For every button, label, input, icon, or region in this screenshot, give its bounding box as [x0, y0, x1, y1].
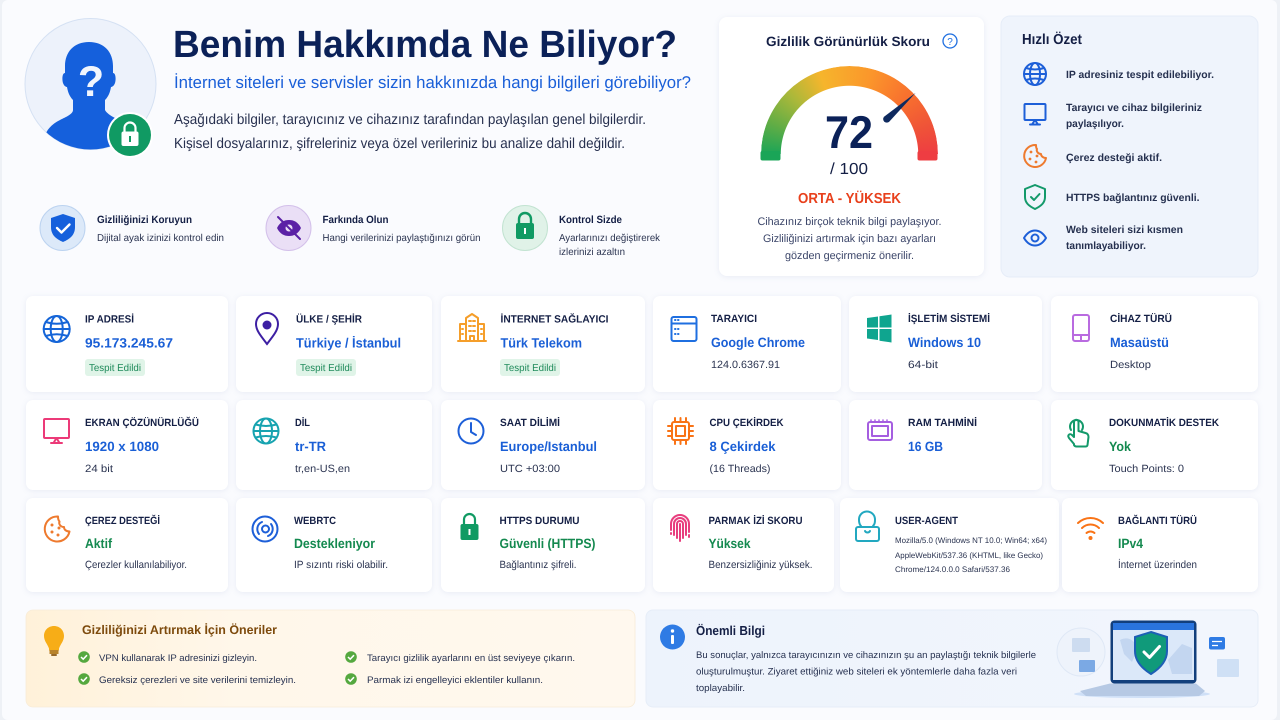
card: touch support: Touch Points: 0 [1109, 463, 1184, 475]
summary item: websites [1066, 224, 1183, 252]
subtitle: İnternet siteleri ve servisler sizin hakkınızda hangi bilgileri görebiliyor? [174, 73, 691, 92]
icon: shield [1025, 185, 1045, 209]
card: cookie support: Aktif [85, 536, 112, 551]
card: webrtc [236, 498, 432, 592]
info text: toplayabilir. [696, 683, 745, 694]
recommendation: cookies: Gereksiz çerezleri ve site verilerini temizleyin. [99, 675, 296, 686]
card: cpu cores: (16 Threads) [710, 463, 770, 475]
feature: protect privacy: Gizliliğinizi Koruyun [97, 214, 192, 226]
summary item: websites: Web siteleri sizi kısmen [1066, 224, 1183, 236]
card: language: DİL [295, 417, 311, 429]
card: internet provider: Türk Telekom [500, 336, 582, 350]
feature: you are in control: Ayarlarınızı değiştirerek [559, 233, 661, 244]
score description: gözden geçirmeniz önerilir. [785, 250, 914, 262]
card: user agent: Mozilla/5.0 (Windows NT 10.0; Win64; x64) [895, 536, 1047, 545]
card: connection type [1062, 498, 1258, 592]
card: ram estimate: RAM TAHMİNİ [908, 417, 977, 429]
card: cookie support [26, 498, 228, 592]
card: device type: CİHAZ TÜRÜ [1110, 313, 1172, 325]
summary item: browser: Tarayıcı ve cihaz bilgileriniz [1066, 102, 1202, 114]
panel: important info [646, 610, 1258, 707]
card: ram estimate: 16 GB [908, 439, 943, 454]
summary heading: Hızlı Özet [1022, 31, 1082, 48]
summary item: https: HTTPS bağlantınız güvenli. [1066, 192, 1200, 204]
card: user agent: AppleWebKit/537.36 (KHTML, like Gecko) [895, 551, 1043, 560]
feature: be aware: Farkında Olun [322, 214, 388, 226]
card: screen resolution [26, 400, 228, 490]
avatar with lock badge [25, 18, 156, 158]
card: fingerprint score: Yüksek [708, 536, 751, 551]
info text [696, 650, 1036, 694]
summary item: browser: paylaşılıyor. [1066, 118, 1124, 130]
recommendation: fingerprint blockers: Parmak izi engelleyici eklentiler kullanın. [367, 675, 543, 686]
card: device type: Desktop [1110, 359, 1151, 371]
info heading: Önemli Bilgi [696, 623, 765, 638]
card: webrtc: WEBRTC [294, 515, 336, 527]
recommendation: vpn: VPN kullanarak IP adresinizi gizleyin. [99, 653, 257, 664]
card: ram estimate [849, 400, 1042, 490]
card: internet provider: Tespit Edildi [504, 363, 556, 374]
icon: info [660, 624, 685, 650]
card: https status [441, 498, 645, 592]
card: cookie support: Çerezler kullanılabiliyor. [85, 559, 187, 571]
gauge heading: Gizlilik Görünürlük Skoru [766, 34, 930, 49]
score description: Cihazınız birçok teknik bilgi paylaşıyor. [758, 216, 942, 228]
card: country and city [236, 296, 432, 392]
illustration: laptop with shield [1057, 620, 1239, 698]
card: time zone [441, 400, 645, 490]
card: operating system: Windows 10 [908, 335, 981, 350]
summary item: websites: tanımlayabiliyor. [1066, 240, 1146, 252]
gauge arc [760, 66, 938, 160]
card: connection type: İnternet üzerinden [1118, 558, 1197, 571]
panel: recommendations [26, 610, 635, 707]
card: time zone: UTC +03:00 [500, 463, 560, 475]
score description [758, 216, 942, 262]
card: ip address: Tespit Edildi [89, 363, 141, 374]
card: https status: Güvenli (HTTPS) [500, 536, 596, 551]
card: connection type: IPv4 [1118, 536, 1143, 551]
card: country and city: Türkiye / İstanbul [296, 336, 401, 350]
card: user agent: Chrome/124.0.0.0 Safari/537.36 [895, 565, 1011, 574]
recommendation: browser settings: Tarayıcı gizlilik ayarlarını en üst seviyeye çıkarın. [367, 653, 575, 664]
card: screen resolution: 24 bit [85, 463, 113, 475]
intro text: Aşağıdaki bilgiler, tarayıcınız ve cihazınız tarafından paylaşılan genel bilgilerdir. [174, 112, 646, 128]
card: fingerprint score [653, 498, 834, 592]
icon: globe [1024, 63, 1046, 85]
card: webrtc: Destekleniyor [294, 536, 376, 551]
feature: you are in control: Kontrol Sizde [559, 214, 622, 226]
card: user agent: USER-AGENT [895, 515, 959, 527]
card: cpu cores: 8 Çekirdek [710, 439, 776, 454]
gauge needle [883, 93, 916, 123]
card: cpu cores [653, 400, 841, 490]
score description: Gizliliğinizi artırmak için bazı ayarları [763, 233, 936, 245]
summary item: browser [1066, 102, 1202, 130]
card: touch support: DOKUNMATİK DESTEK [1109, 417, 1219, 429]
card: touch support: Yok [1109, 439, 1131, 454]
panel: privacy score gauge [719, 17, 984, 276]
info text: Bu sonuçlar, yalnızca tarayıcınızın ve cihazınızın şu an paylaştığı teknik bilgilerle [696, 650, 1036, 661]
summary item: ip: IP adresiniz tespit edilebiliyor. [1066, 69, 1214, 81]
recommendations heading: Gizliliğinizi Artırmak İçin Öneriler [82, 623, 277, 637]
card: https status: HTTPS DURUMU [500, 515, 580, 527]
card: operating system [849, 296, 1042, 392]
card: language: tr-TR [295, 439, 326, 454]
icon: eye [1024, 230, 1046, 246]
card: touch support [1051, 400, 1258, 490]
info text: oluşturulmuştur. Ziyaret ettiğiniz web siteleri ek yöntemlerle daha fazla veri [696, 666, 1017, 678]
card: browser [653, 296, 841, 392]
card: screen resolution: 1920 x 1080 [85, 439, 159, 454]
icon: light bulb [44, 626, 64, 656]
intro text [174, 112, 646, 152]
card: country and city: ÜLKE / ŞEHİR [296, 314, 362, 326]
card: time zone: SAAT DİLİMİ [500, 417, 560, 429]
card: language [236, 400, 432, 490]
card: ip address [26, 296, 228, 392]
avatar with lock badge: ? [78, 58, 104, 106]
card: device type: Masaüstü [1110, 335, 1169, 350]
feature: you are in control: izlerinizi azaltın [559, 247, 625, 258]
card: time zone: Europe/Istanbul [500, 439, 597, 454]
icon: help: ? [947, 37, 953, 48]
card: device type [1051, 296, 1258, 392]
card: fingerprint score: Benzersizliğiniz yüksek. [708, 559, 812, 571]
card: ip address: 95.173.245.67 [85, 336, 173, 350]
feature: protect privacy [40, 206, 224, 250]
feature: be aware [266, 206, 480, 250]
icon: monitor [1024, 104, 1046, 124]
intro text: Kişisel dosyalarınız, şifreleriniz veya özel verileriniz bu analize dahil değildir. [174, 136, 625, 152]
score level: ORTA - YÜKSEK [798, 190, 901, 207]
card: browser: TARAYICI [711, 313, 757, 325]
card: user agent [840, 498, 1059, 592]
feature: you are in control [502, 206, 661, 258]
score value: 72 [825, 106, 873, 158]
icon: cookie [1024, 145, 1046, 167]
card: browser: Google Chrome [711, 335, 805, 350]
card: ip address: IP ADRESİ [85, 314, 134, 326]
score max: / 100 [830, 161, 868, 178]
card: https status: Bağlantınız şifreli. [500, 559, 576, 571]
card: language: tr,en-US,en [295, 463, 350, 475]
icon: help [943, 34, 957, 48]
card: operating system: İŞLETİM SİSTEMİ [908, 313, 990, 325]
card: browser: 124.0.6367.91 [711, 359, 780, 371]
card: webrtc: IP sızıntı riski olabilir. [294, 559, 388, 571]
card: fingerprint score: PARMAK İZİ SKORU [708, 515, 802, 527]
card: cookie support: ÇEREZ DESTEĞİ [85, 514, 160, 527]
card: cpu cores: CPU ÇEKİRDEK [710, 417, 784, 429]
title: Benim Hakkımda Ne Biliyor? [173, 24, 677, 66]
feature: be aware: Hangi verilerinizi paylaştığınızı görün [322, 233, 480, 244]
card: screen resolution: EKRAN ÇÖZÜNÜRLÜĞÜ [85, 416, 199, 429]
card: operating system: 64-bit [908, 359, 938, 371]
panel: quick summary [1001, 16, 1258, 277]
feature: protect privacy: Dijital ayak izinizi kontrol edin [97, 233, 224, 244]
card: connection type: BAĞLANTI TÜRÜ [1118, 514, 1197, 527]
card: internet provider [441, 296, 645, 392]
card: internet provider: İNTERNET SAĞLAYICI [500, 312, 609, 326]
summary item: cookies: Çerez desteği aktif. [1066, 152, 1162, 164]
card: country and city: Tespit Edildi [300, 363, 352, 374]
